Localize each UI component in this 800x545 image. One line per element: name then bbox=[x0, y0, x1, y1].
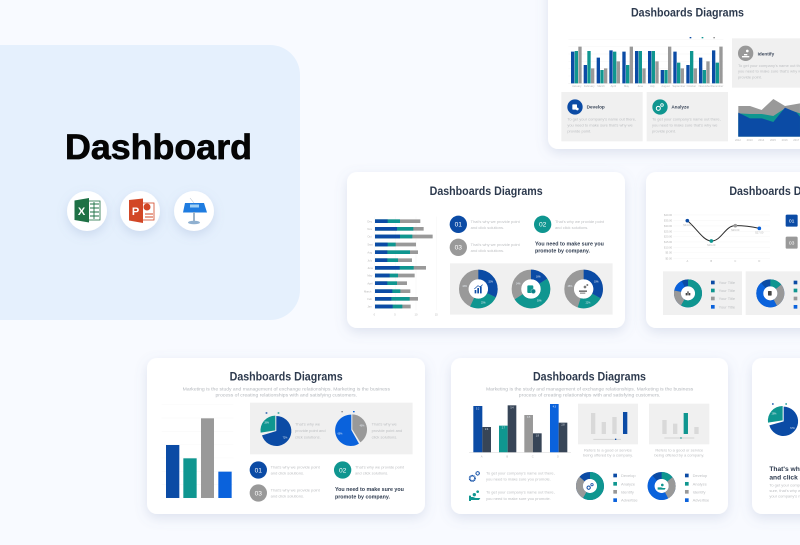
panel: donut with legend: Your Title bbox=[719, 288, 736, 293]
panel: Develop: Develop bbox=[587, 105, 605, 110]
chart: line: $25.00 bbox=[664, 229, 673, 233]
panel: mini bar chart 1 bbox=[578, 404, 638, 444]
chart: donut 2: 34% bbox=[516, 283, 521, 285]
badge: 02: That's why we provide point bbox=[355, 464, 405, 469]
subtitle: Marketing is the study and management of exchange relationships. Marketing is the business bbox=[183, 386, 391, 391]
chart: donut with legend 2: Analyze bbox=[693, 481, 708, 486]
chart: donut with legend 2: Develop bbox=[693, 473, 708, 478]
chart: stacked area: 2016 bbox=[782, 138, 788, 142]
chart: donut with legend 1: Analyze bbox=[621, 481, 636, 486]
chart: horizontal stacked bars: April bbox=[367, 281, 373, 285]
chart: line: $5.00 bbox=[665, 251, 673, 255]
chart: stacked area: 2013 bbox=[747, 138, 753, 142]
chart: donut 3 bbox=[568, 274, 599, 305]
chart: line: $20.00 bbox=[664, 235, 673, 239]
chart: line: A bbox=[686, 259, 688, 263]
panel: two pies bbox=[250, 403, 413, 454]
panel: donut with legend: Your Title bbox=[719, 296, 736, 301]
chart: monthly grouped bars bbox=[568, 37, 723, 88]
icon: PowerPoint: P bbox=[132, 206, 139, 218]
icon: hand with coins bbox=[469, 490, 480, 501]
subtitle bbox=[486, 386, 694, 398]
chart: paired columns: 5.4 bbox=[510, 408, 514, 410]
chart: monthly grouped bars: March bbox=[597, 84, 605, 88]
caption 1 bbox=[583, 448, 633, 458]
chart: pie bbox=[768, 403, 798, 436]
chart: horizontal stacked bars: Feb bbox=[367, 297, 372, 301]
panel: partial pie card bbox=[752, 358, 800, 514]
chart: line: C bbox=[734, 259, 736, 263]
chart: horizontal stacked bars: Oct bbox=[367, 235, 372, 239]
chart: donut 2 bbox=[516, 274, 545, 303]
icon: PowerPoint bbox=[120, 191, 160, 231]
chart: donut 3: 45% bbox=[568, 286, 572, 288]
badge: 03: and click solutions. bbox=[271, 493, 304, 498]
chart: horizontal stacked bars: March bbox=[364, 289, 372, 293]
chart: donut 2: 50% bbox=[537, 300, 542, 302]
caption 1: Refers to a good or service bbox=[584, 448, 633, 453]
badge: 01: That's why we provide point bbox=[271, 464, 321, 469]
heading: Dashboard: Dashboard bbox=[65, 128, 252, 167]
chart: horizontal stacked bars: Sept bbox=[367, 243, 373, 247]
heading: card title: Dashboards Diagrams bbox=[631, 6, 744, 19]
subtitle: Marketing is the study and management of exchange relationships. Marketing is the business bbox=[486, 386, 694, 391]
badge: 03: That's why we provide point bbox=[271, 487, 321, 492]
chart: donut with legend 1: Advertise bbox=[621, 498, 638, 503]
chart: paired columns: D bbox=[557, 454, 559, 458]
chart: horizontal stacked bars: June bbox=[367, 266, 374, 270]
chart: line: $40.00 bbox=[664, 213, 673, 217]
chart: donut with legend 2 bbox=[651, 473, 710, 503]
chart: pie 2: 40% bbox=[360, 426, 364, 428]
chart: paired columns: 2.7 bbox=[502, 428, 506, 430]
caption 2 bbox=[654, 448, 704, 458]
badge: 01: and click solutions. bbox=[271, 470, 304, 475]
text: promote 1 bbox=[486, 470, 555, 482]
panel: donut with legend: Your Title bbox=[719, 304, 736, 309]
badge: 03: That's why we provide point bbox=[471, 242, 521, 247]
subtitle: process of creating relationships with and satisfying customers. bbox=[215, 393, 357, 398]
badge: 03: 03 bbox=[455, 245, 462, 252]
chart: pie 1 bbox=[260, 412, 326, 446]
badge: 01 bbox=[250, 461, 321, 479]
chart: line: $35.00 bbox=[664, 218, 673, 222]
chart: line: $27.00 bbox=[755, 231, 764, 235]
chart: pie 2: That's why we bbox=[372, 422, 398, 427]
icon: Keynote bbox=[174, 191, 214, 231]
chart: donut 1: 43% bbox=[462, 286, 467, 288]
panel: Analyze: To get your company's name out there, bbox=[652, 117, 721, 122]
panel: paired bars card bbox=[451, 358, 728, 514]
chart: monthly grouped bars: June bbox=[637, 84, 644, 88]
chart: horizontal stacked bars: 5 bbox=[394, 312, 396, 316]
badge: 01: That's why we provide point bbox=[471, 219, 521, 224]
badge: 02: That's why we provide point bbox=[555, 219, 605, 224]
panel: Develop: you need to make sure that's why we bbox=[567, 122, 634, 127]
chart: line: $15.00 bbox=[664, 240, 673, 244]
chart: line: $16.20 bbox=[707, 243, 716, 247]
heading: card title: Dashboards Diagrams bbox=[533, 371, 646, 384]
chart: paired columns: 3.5 bbox=[527, 417, 531, 419]
icon: Excel: X bbox=[78, 206, 86, 218]
chart: horizontal stacked bars: 10 bbox=[415, 312, 418, 316]
chart: donut with legend 1: Develop bbox=[621, 473, 636, 478]
chart: horizontal stacked bars: Dec bbox=[367, 219, 373, 223]
panel: Identify bbox=[732, 38, 800, 88]
callout text: promote by company. bbox=[535, 249, 590, 255]
chart: line: $30.00 bbox=[664, 224, 673, 228]
chart: pie 1: 72% bbox=[283, 438, 287, 440]
badge: 02: and click solutions. bbox=[555, 225, 588, 230]
subtitle bbox=[183, 386, 391, 398]
chart: pie 1: click solutions. bbox=[295, 434, 321, 439]
chart: horizontal stacked bars: May bbox=[367, 274, 373, 278]
panel: Analyze bbox=[647, 92, 728, 141]
callout text bbox=[769, 466, 800, 499]
chart: pie 2: provide point and bbox=[372, 428, 402, 433]
text: promote 1: To get your company's name out there, bbox=[486, 470, 555, 475]
panel: Identify: provide point. bbox=[738, 75, 762, 80]
chart: pie 2: 60% bbox=[338, 433, 342, 435]
badge: 01: 01 bbox=[789, 218, 795, 224]
chart: stacked area: 2014 bbox=[758, 138, 765, 142]
panel: second donut with legend bbox=[746, 271, 800, 315]
chart: line: B bbox=[710, 259, 712, 263]
badge: 03: 03 bbox=[255, 490, 262, 497]
chart: horizontal stacked bars: 15 bbox=[435, 312, 438, 316]
chart: stacked area: 2012 bbox=[735, 138, 741, 142]
chart: paired columns: B bbox=[506, 454, 508, 458]
badge: 02: and click solutions. bbox=[355, 470, 388, 475]
chart: donut 1: 25% bbox=[481, 303, 486, 305]
chart: pie 2: click solutions. bbox=[372, 434, 397, 439]
panel: Develop: provide point. bbox=[567, 128, 591, 133]
text: promote 1: you need to make sure you promote. bbox=[486, 477, 551, 482]
icon: Excel bbox=[67, 191, 107, 231]
chart: paired columns: 1.8 bbox=[536, 435, 540, 437]
panel: Analyze: you need to make sure that's why we bbox=[652, 122, 718, 127]
panel: Develop bbox=[561, 92, 643, 141]
chart: donut 1 bbox=[462, 274, 493, 305]
chart: stacked area: 2015 bbox=[770, 138, 776, 142]
chart: paired columns: 4.3 bbox=[553, 406, 557, 408]
chart: line: $0.00 bbox=[665, 256, 673, 260]
panel: hero bbox=[0, 45, 300, 320]
panel: three donuts bbox=[450, 263, 613, 315]
chart: donut 3: 33% bbox=[594, 282, 599, 284]
panel: horizontal bars card bbox=[347, 172, 625, 328]
chart: horizontal stacked bars bbox=[364, 217, 438, 316]
callout text: You need to make sure you bbox=[335, 487, 404, 493]
chart: donut 1: 32% bbox=[488, 282, 493, 284]
chart: line: $34.00 bbox=[683, 223, 692, 227]
chart: line: $10.00 bbox=[664, 245, 673, 249]
chart: paired columns: C bbox=[532, 454, 534, 458]
callout text bbox=[535, 242, 604, 255]
badge: 02 bbox=[534, 216, 605, 233]
chart: paired columns: A bbox=[481, 454, 483, 458]
text: promote 2: you need to make sure you promote. bbox=[486, 496, 551, 501]
callout text bbox=[335, 487, 404, 500]
badge: 01: 01 bbox=[255, 467, 262, 474]
chart: monthly grouped bars: July bbox=[650, 84, 655, 88]
chart: monthly grouped bars: November bbox=[699, 84, 711, 88]
heading: card title: Dashboards Diagrams bbox=[230, 371, 343, 384]
chart: pie 1: That's why we bbox=[295, 422, 321, 427]
chart: paired columns: 2.8 bbox=[561, 425, 565, 427]
panel: line chart card bbox=[646, 172, 800, 328]
chart: pie 2 bbox=[335, 411, 402, 446]
callout text: promote by company. bbox=[335, 494, 390, 500]
panel: Analyze: Analyze bbox=[671, 105, 689, 110]
chart: line: D bbox=[758, 259, 760, 263]
chart: donut with legend 1 bbox=[579, 473, 638, 503]
text: promote 2 bbox=[486, 490, 555, 501]
panel: Analyze: provide point. bbox=[652, 128, 676, 133]
chart: pie: 28% bbox=[772, 413, 776, 415]
heading: card title: Dashboards Diagrams bbox=[430, 185, 543, 198]
caption 2: Refers to a good or service bbox=[655, 448, 704, 453]
chart: monthly grouped bars: May bbox=[624, 84, 630, 88]
panel: donut with legend bbox=[663, 271, 742, 315]
chart: horizontal stacked bars: Nov bbox=[367, 227, 373, 231]
chart: monthly grouped bars: January bbox=[572, 84, 582, 88]
badge: 02: 02 bbox=[339, 467, 347, 474]
chart: stacked area bbox=[735, 99, 800, 142]
chart: columns bbox=[162, 405, 233, 498]
chart: stacked area: 2017 bbox=[793, 138, 800, 142]
panel: mini bar chart 2 bbox=[649, 404, 709, 444]
caption 1: being offered by a company. bbox=[583, 453, 633, 458]
chart: monthly grouped bars: February bbox=[584, 84, 595, 88]
chart: pie 1: provide point and bbox=[295, 428, 326, 433]
chart: monthly grouped bars: April bbox=[611, 84, 616, 88]
panel: column chart card bbox=[147, 358, 425, 514]
chart: donut with legend 2: Advertise bbox=[693, 498, 710, 503]
chart: paired columns: 2.4 bbox=[485, 429, 489, 431]
chart: pie: 72% bbox=[790, 428, 795, 430]
caption 2: being offered by a company. bbox=[654, 453, 704, 458]
chart: monthly grouped bars: October bbox=[687, 84, 696, 88]
badge: 03: 03 bbox=[789, 240, 795, 246]
panel: Identify: Identify bbox=[758, 51, 775, 56]
chart: paired columns: 5.2 bbox=[476, 409, 480, 411]
badge: 01 bbox=[786, 215, 798, 227]
chart: paired columns bbox=[469, 404, 571, 458]
badge: 01: and click solutions. bbox=[471, 225, 504, 230]
callout text: You need to make sure you bbox=[535, 242, 604, 248]
panel: donut with legend: Your Title bbox=[719, 280, 736, 285]
chart: horizontal stacked bars: Aug bbox=[367, 250, 373, 254]
chart: monthly grouped bars: September bbox=[672, 84, 685, 88]
chart: donut 2: 16% bbox=[536, 277, 541, 279]
chart: horizontal stacked bars: Jan bbox=[367, 305, 372, 309]
chart: donut 3: 22% bbox=[586, 303, 590, 305]
chart: horizontal stacked bars: July bbox=[367, 258, 373, 262]
badge: 03: and click solutions. bbox=[471, 248, 504, 253]
chart: line bbox=[664, 213, 770, 263]
icon: gears bbox=[470, 472, 479, 481]
chart: line: $29.00 bbox=[731, 228, 740, 232]
badge: 03 bbox=[250, 484, 321, 502]
text: promote 2: To get your company's name out there, bbox=[486, 490, 555, 495]
chart: monthly grouped bars: December bbox=[711, 84, 723, 88]
badge: 03 bbox=[450, 239, 521, 256]
chart: monthly grouped bars: August bbox=[661, 84, 670, 88]
subtitle: process of creating relationships with and satisfying customers. bbox=[519, 393, 660, 398]
panel: top dashboard card bbox=[548, 0, 800, 149]
chart: pie 1: 28% bbox=[264, 423, 269, 425]
panel: Develop: To get your company's name out there, bbox=[567, 117, 636, 122]
badge: 02 bbox=[334, 461, 405, 479]
chart: donut with legend 1: Identify bbox=[621, 489, 634, 494]
badge: 03 bbox=[786, 237, 798, 249]
badge: 02: 02 bbox=[539, 222, 547, 229]
chart: donut with legend 2: Identify bbox=[693, 489, 706, 494]
badge: 01 bbox=[450, 216, 521, 233]
chart: horizontal stacked bars: 0 bbox=[374, 312, 376, 316]
badge: 01: 01 bbox=[455, 222, 462, 229]
